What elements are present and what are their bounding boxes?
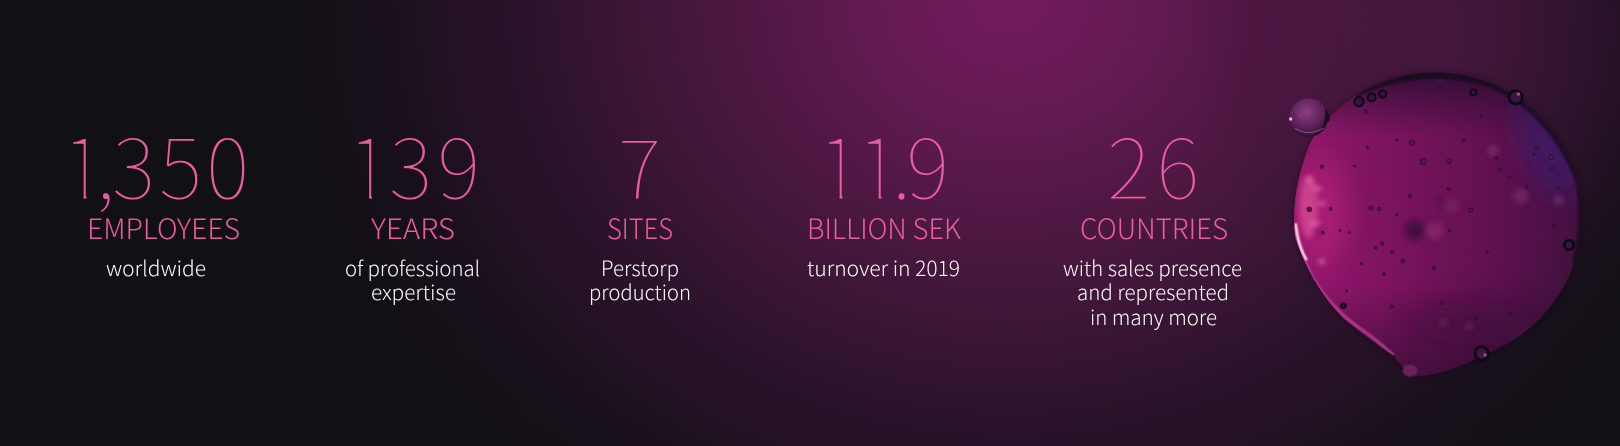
- number: 11.9: 11.9: [818, 103, 949, 223]
- panel: turnover stat: [807, 103, 962, 283]
- label: years: YEARS: [371, 208, 455, 248]
- number: 139: 139: [347, 103, 480, 223]
- panel: sites stat: [589, 103, 691, 307]
- label: sites: SITES: [607, 208, 673, 248]
- label: billion sek: BILLION SEK: [807, 208, 962, 248]
- number: 7: 7: [618, 103, 661, 223]
- rim bubbles: [1341, 89, 1476, 308]
- label: countries: COUNTRIES: [1080, 208, 1228, 248]
- description: Perstorp production: Perstorp: [601, 253, 679, 283]
- dark edge bubbles: [1475, 91, 1574, 360]
- description: sales presence: with sales presence: [1063, 253, 1242, 283]
- number: 26: 26: [1107, 103, 1199, 223]
- number: 1,350: 1,350: [62, 103, 249, 223]
- description: Perstorp production: production: [589, 277, 691, 307]
- soft inner blisters: [1317, 145, 1563, 329]
- satellite droplet: [1289, 98, 1330, 137]
- panel: countries stat: [1063, 103, 1242, 332]
- description: professional expertise: of professional: [345, 253, 480, 283]
- tiny bubbles: [1307, 79, 1559, 319]
- description: sales presence: and represented: [1077, 277, 1229, 307]
- description: worldwide: worldwide: [106, 253, 206, 283]
- description: sales presence: in many more: [1090, 302, 1217, 332]
- panel: years stat: [345, 103, 480, 307]
- label: employees: EMPLOYEES: [87, 208, 240, 248]
- illustration: liquid droplet: [1287, 63, 1589, 383]
- description: professional expertise: expertise: [371, 277, 456, 307]
- description: turnover: turnover in 2019: [807, 253, 960, 283]
- panel: employees stat: [62, 103, 249, 283]
